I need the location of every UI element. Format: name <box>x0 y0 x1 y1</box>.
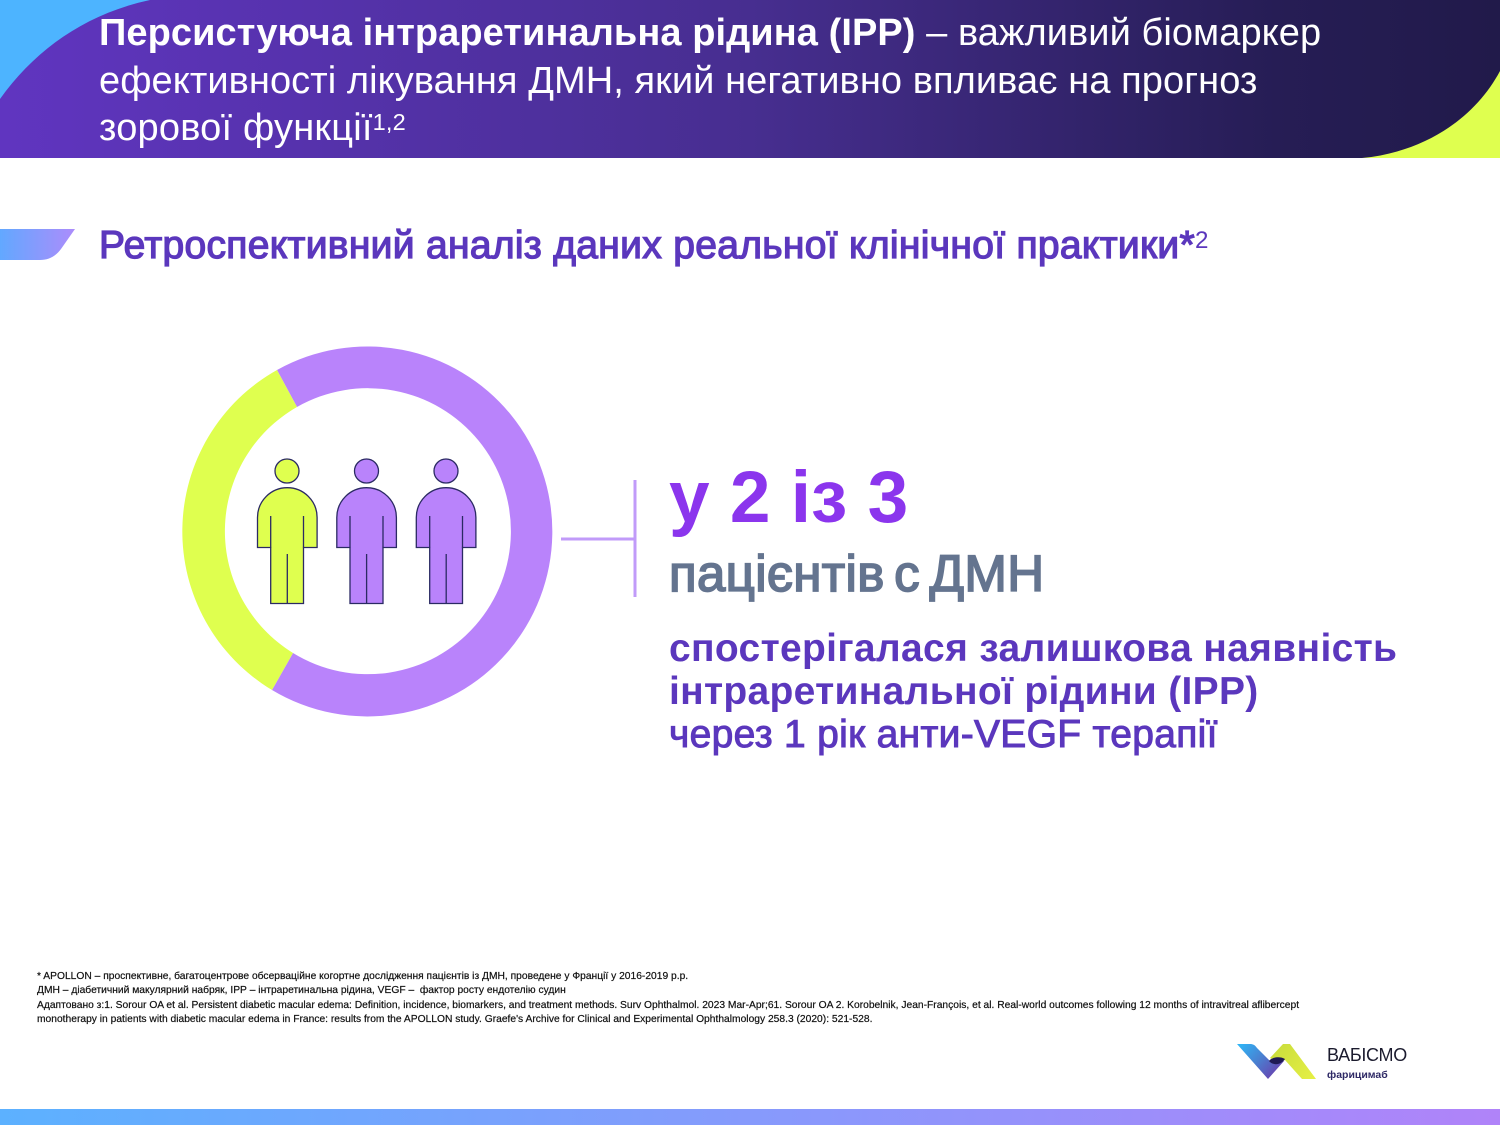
footnotes: monotherapy in patients with diabetic macular edema in France: results from the APOLLON study. Graefe's Archive for Clinical and Experimental Ophthalmology 258.3 (2020): 521-528. <box>37 1014 872 1025</box>
title: Персистуюча інтраретинальна рідина (ІРР) – важливий біомаркер <box>99 12 1321 54</box>
title: ефективності лікування ДМН, який негативно впливає на прогноз <box>99 60 1257 102</box>
finding text: спостерігалася залишкова наявність <box>669 627 1397 670</box>
finding text: через 1 рік анти-VEGF терапії <box>669 713 1218 756</box>
connector bracket <box>561 480 636 597</box>
footnotes <box>36 971 1300 1025</box>
icon: person purple 1 <box>337 459 396 604</box>
header band <box>0 0 1500 158</box>
logo subtitle: фарицимаб <box>1327 1069 1388 1081</box>
footnotes: Адаптовано з:1. Sorour OA et al. Persistent diabetic macular edema: Definition, incidence, biomarkers, and treatment methods. Surv Ophthalmol. 2023 Mar-Apr;61. Sorour OA 2. Korobelnik, Jean-François, et al. Real-world outcomes following 12 months of intravitreal aflibercept <box>37 1000 1299 1011</box>
title <box>99 12 1321 149</box>
icon: person lime <box>258 459 317 604</box>
footnotes: ДМН – діабетичний макулярний набряк, ІРР – інтраретинальна рідина, VEGF – фактор росту ендотелію судин <box>37 985 566 996</box>
logo wordmark: ВАБІСМО <box>1327 1045 1407 1065</box>
finding text: інтраретинальної рідини (ІРР) <box>669 670 1259 713</box>
title: зорової функції1,2 <box>99 107 406 149</box>
logo: Vabysmo <box>1237 1044 1407 1081</box>
icon: person purple 2 <box>416 459 476 604</box>
donut chart with people <box>182 346 552 716</box>
donut: lime share <box>182 370 297 690</box>
statistic subject: пацієнтів с ДМН <box>669 545 1044 602</box>
section accent shape <box>0 229 75 260</box>
finding text <box>669 627 1397 756</box>
footnotes: * APOLLON – проспективне, багатоцентрове обсерваційне когортне дослідження пацієнтів із ДМН, проведене у Франції у 2016-2019 р.р. <box>37 971 688 982</box>
section heading: Ретроспективний аналіз даних реальної клінічної практики*2 <box>99 224 1209 267</box>
key statistic: у 2 із 3 <box>669 457 908 538</box>
bottom gradient bar <box>0 1109 1500 1125</box>
donut: purple share <box>272 346 552 716</box>
